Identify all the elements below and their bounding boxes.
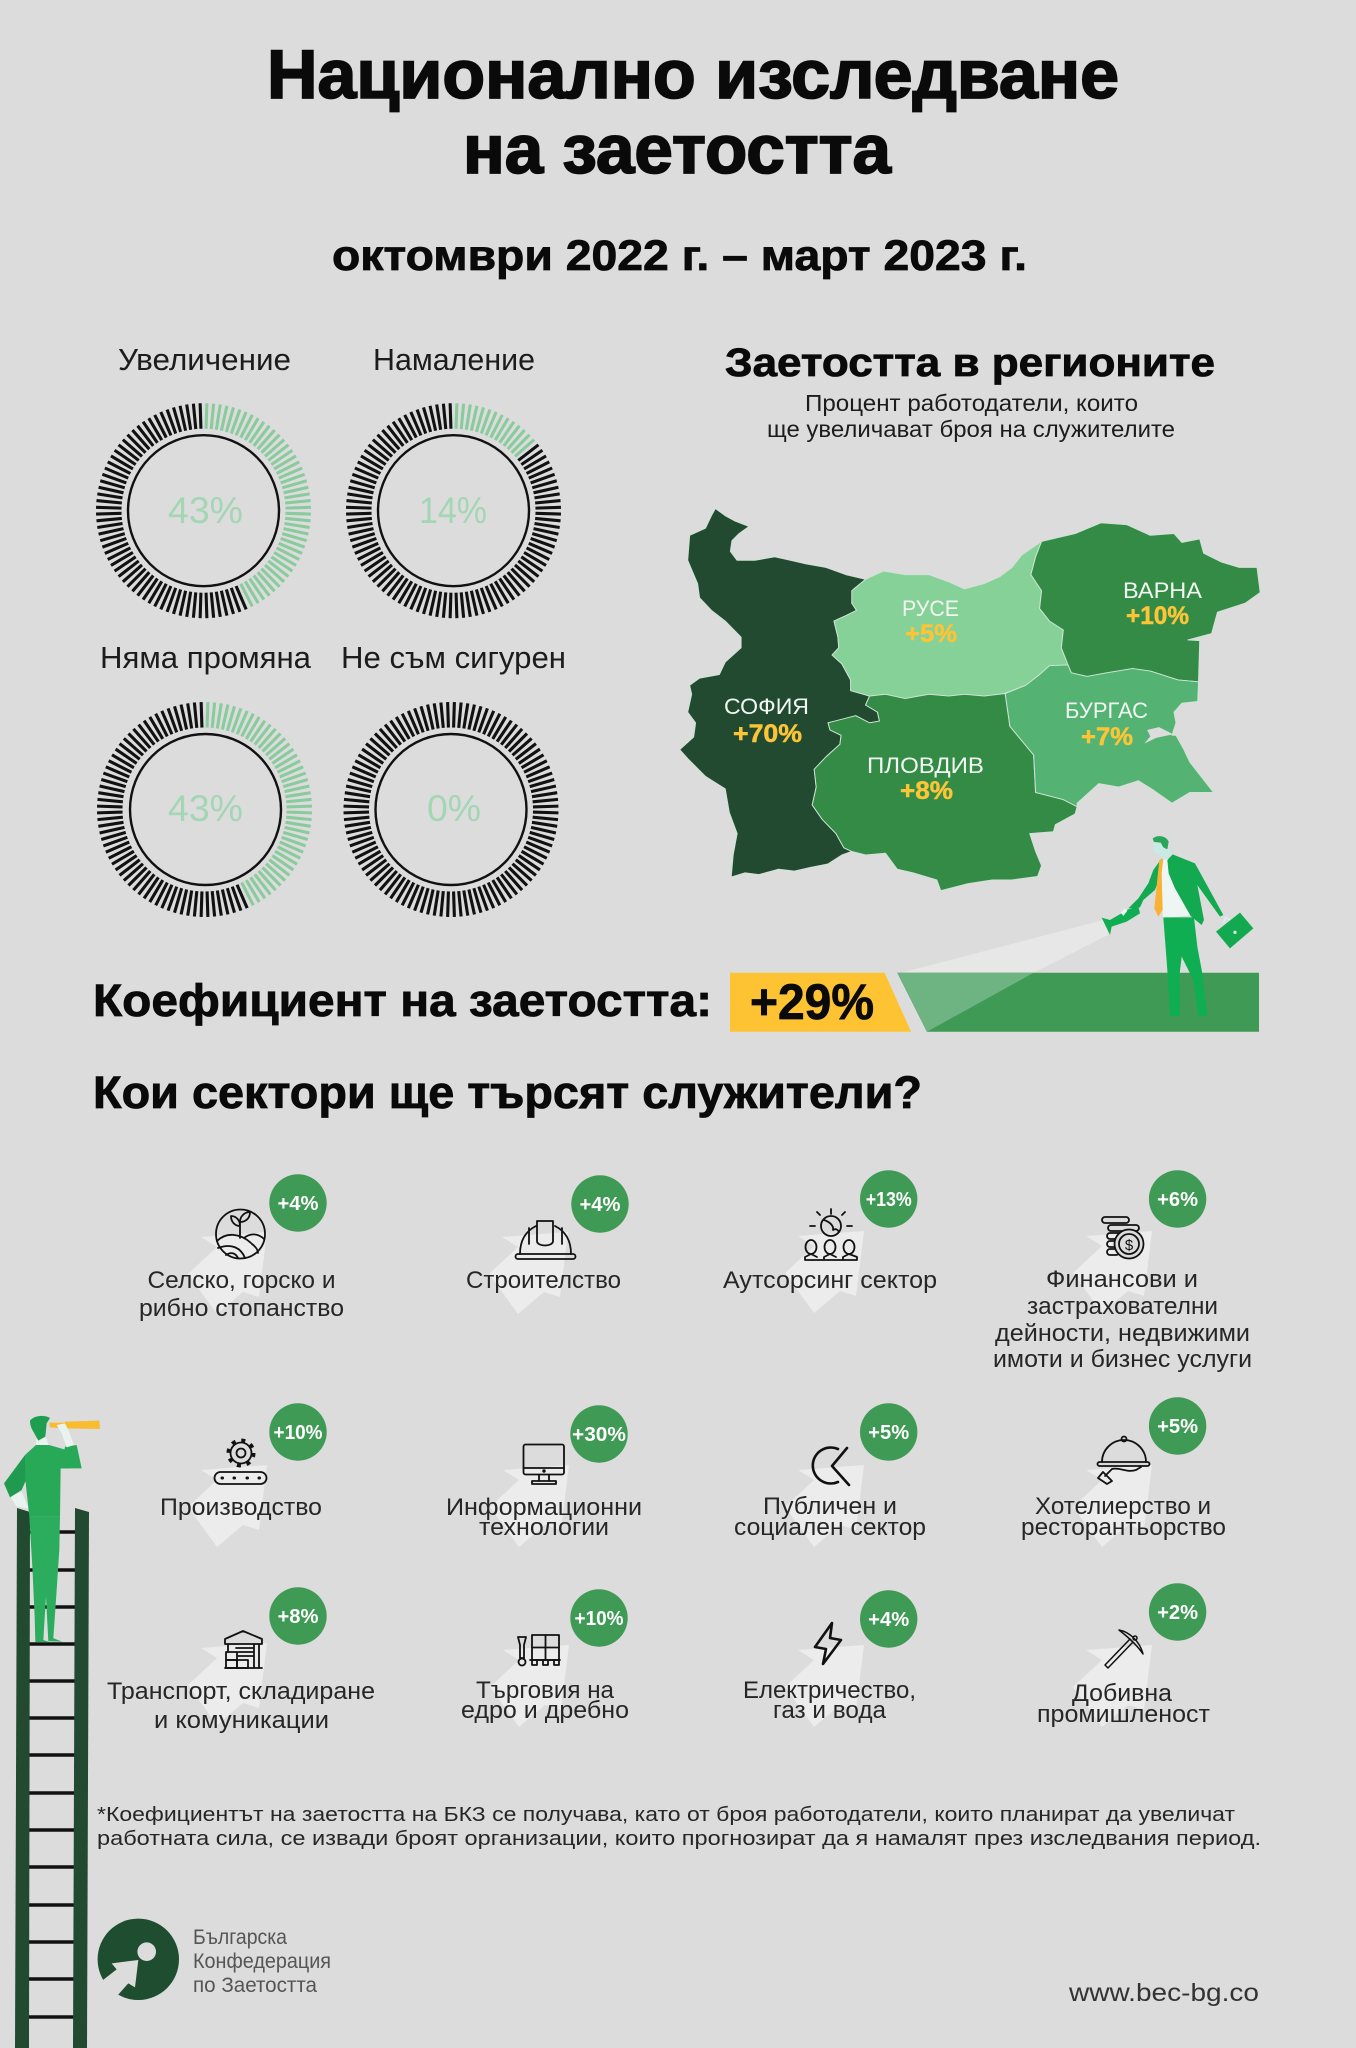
sector: finance: Финансови и [1046, 1266, 1198, 1293]
website: www.bec-bg.co [1068, 1979, 1259, 2007]
map labels: СОФИЯ [724, 694, 809, 719]
illustration: man with telescope [4, 1416, 100, 1642]
subtitle: period: октомври 2022 г. – март 2023 г. [332, 232, 1027, 280]
region: Ruse [832, 541, 1068, 699]
heading: employment coefficient: Коефициент на заетостта: [93, 975, 712, 1026]
sector: transport and storage: и комуникации [154, 1707, 329, 1734]
map labels [724, 578, 1202, 805]
sector: outsourcing: +13% [866, 1189, 912, 1211]
map labels: +10% [1126, 602, 1189, 630]
donut: no change 43%: Няма промяна [100, 640, 312, 675]
illustration: man with flashlight [1102, 836, 1253, 1016]
donut: not sure 0%: Не съм сигурен [341, 640, 566, 675]
icon: coins [1102, 1217, 1144, 1258]
donut: increase 43% [96, 349, 311, 618]
region: Varna [1031, 523, 1260, 682]
logo: Bulgarian Employment Confederation: Конфедерация [193, 1950, 331, 1973]
title: Национално изследване [267, 36, 1119, 113]
donut: no change 43% [97, 647, 312, 917]
sector: trade: Търговия на [476, 1677, 615, 1704]
map labels: ВАРНА [1123, 578, 1202, 603]
panel: survey donuts [84, 342, 573, 931]
sector: trade [461, 1589, 629, 1724]
sector: agriculture: рибно стопанство [139, 1295, 344, 1322]
icon: plant and fields [216, 1210, 265, 1258]
sector: public and social [734, 1403, 926, 1541]
sector: IT: +30% [572, 1424, 626, 1446]
heading: regions: Процент работодатели, които [805, 390, 1138, 416]
title [267, 36, 1119, 188]
sector: hospitality: +5% [1157, 1416, 1198, 1438]
sector: construction: +4% [580, 1194, 621, 1216]
logo: Bulgarian Employment Confederation [98, 1919, 331, 2000]
icon: lightning bolt [815, 1623, 841, 1664]
sector: construction: Строителство [466, 1267, 621, 1294]
donut: increase 43%: Увеличение [118, 342, 291, 377]
sector: utilities: Електричество, [743, 1677, 916, 1704]
sector: transport and storage: Транспорт, складиране [107, 1678, 375, 1705]
map labels: РУСЕ [902, 596, 959, 621]
beam highlight on band [897, 973, 1034, 1032]
background arrows [188, 1231, 1152, 1727]
sector: finance: дейности, недвижими [995, 1320, 1250, 1347]
region: Sofia [680, 509, 879, 877]
map labels: +7% [1081, 723, 1133, 751]
sector: transport and storage: +8% [278, 1606, 319, 1628]
donut: decrease 14%: Намаление [373, 342, 535, 377]
sector: manufacturing [160, 1403, 327, 1521]
map of Bulgaria [680, 509, 1260, 891]
heading: regions [725, 341, 1215, 442]
sector: public and social: социален сектор [734, 1514, 926, 1541]
sector: finance: +6% [1157, 1189, 1198, 1211]
sector: agriculture [139, 1174, 344, 1322]
donut: increase 43%: 43% [168, 490, 243, 531]
sector: manufacturing: Производство [160, 1494, 322, 1521]
Burgas bay [1144, 727, 1173, 744]
logo: Bulgarian Employment Confederation: Българска [193, 1926, 287, 1949]
sector: finance: застрахователни [1027, 1293, 1218, 1320]
region: Burgas [1005, 665, 1214, 807]
icon: hard hat [516, 1221, 576, 1259]
icon: pickaxe [1105, 1630, 1143, 1668]
sector: hospitality: Хотелиерство и [1035, 1493, 1211, 1520]
sector: utilities [743, 1590, 917, 1724]
footnote: *Коефициентът на заетостта на БКЗ се получава, като от броя работодатели, които планират да увеличат [97, 1804, 1235, 1826]
donut: no change 43%: 43% [168, 788, 243, 829]
sector: trade: +10% [574, 1608, 624, 1630]
heading: regions: Заетостта в регионите [725, 341, 1215, 385]
sector: construction [466, 1175, 629, 1294]
sector: outsourcing [723, 1170, 937, 1294]
donut: not sure 0% [332, 640, 570, 931]
sector: public and social: +5% [868, 1422, 909, 1444]
sector: IT: Информационни [446, 1494, 642, 1521]
sector: trade: едро и дребно [461, 1697, 629, 1724]
footnote [97, 1804, 1261, 1850]
sector: finance [993, 1170, 1252, 1373]
footnote: работната сила, се извади броят организации, които прогнозират да я намалят през изследвания период. [97, 1828, 1261, 1850]
icon: pallet jack [518, 1635, 560, 1666]
sector: mining [1037, 1583, 1210, 1728]
sector: mining: промишленост [1037, 1701, 1210, 1728]
icon: warehouse [225, 1631, 262, 1668]
sector: hospitality [1021, 1397, 1226, 1541]
sector: public and social: Публичен и [763, 1493, 897, 1520]
donut: decrease 14%: 14% [419, 490, 487, 531]
heading: sectors: Кои сектори ще търсят служители? [93, 1067, 922, 1118]
sector: agriculture: +4% [278, 1193, 319, 1215]
icon: gear on conveyor [214, 1440, 266, 1484]
sector: finance: имоти и бизнес услуги [993, 1346, 1252, 1373]
donut: not sure 0%: 0% [427, 788, 481, 829]
donut: decrease 14% [346, 349, 561, 618]
illustration: ladder [15, 1508, 89, 2048]
icon: globe and people [805, 1209, 857, 1260]
green band [897, 973, 1259, 1032]
region: Plovdiv [812, 694, 1077, 891]
logo: Bulgarian Employment Confederation: по Заетостта [193, 1974, 317, 1997]
map labels: ПЛОВДИВ [867, 753, 984, 778]
sector: manufacturing: +10% [274, 1422, 323, 1444]
sector: utilities: +4% [868, 1609, 909, 1631]
heading: regions: ще увеличават броя на служителите [767, 416, 1175, 442]
sector: utilities: газ и вода [773, 1697, 887, 1724]
sector: finance: $ [1125, 1237, 1134, 1254]
map labels: +8% [900, 777, 953, 805]
sector: outsourcing: Аутсорсинг сектор [723, 1267, 937, 1294]
flashlight beam [901, 920, 1111, 973]
icon: cloche on hand [1098, 1436, 1150, 1484]
sector: mining: +2% [1157, 1602, 1198, 1624]
map labels: +5% [905, 620, 957, 648]
coefficient band [730, 920, 1259, 1032]
value: +29%: +29% [750, 974, 874, 1030]
sector: IT: технологии [479, 1514, 609, 1541]
map labels: БУРГАС [1065, 698, 1148, 723]
sector: agriculture: Селско, горско и [148, 1267, 336, 1294]
title: на заетостта [463, 111, 892, 188]
sector: mining: Добивна [1072, 1680, 1173, 1707]
sector: transport and storage [107, 1587, 375, 1734]
map labels: +70% [733, 720, 802, 748]
icon: public sector symbol [813, 1448, 849, 1485]
sector: hospitality: ресторантьорство [1021, 1514, 1226, 1541]
yellow tag [730, 973, 911, 1032]
icon: monitor [524, 1444, 564, 1484]
sector: IT [446, 1405, 642, 1541]
